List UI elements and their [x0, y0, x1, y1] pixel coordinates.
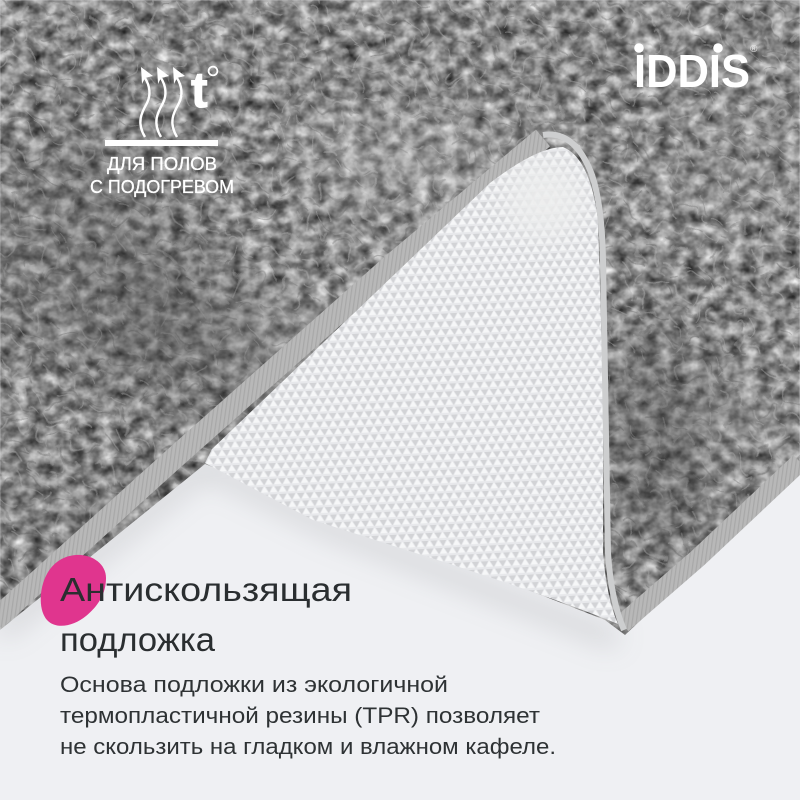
- pink accent blob: [41, 555, 106, 626]
- logo: IDDIS: IDDIS: [634, 45, 750, 97]
- title: подложка: [60, 621, 216, 658]
- rug shadow on the floor: [0, 466, 617, 640]
- icon: heated floor badge: [90, 62, 234, 197]
- icon: heated floor badge: С ПОДОГРЕВОМ: [90, 177, 234, 197]
- logo: IDDIS: ®: [750, 44, 758, 55]
- description text: термопластичной резины (TPR) позволяет: [60, 703, 540, 728]
- title: [60, 571, 352, 658]
- title: Антискользящая: [60, 571, 352, 608]
- icon: heated floor badge: t: [191, 62, 208, 118]
- rug lower-right binding: [622, 462, 800, 624]
- folded corner: white anti-slip backing: [205, 134, 624, 630]
- icon: heated floor badge: ДЛЯ ПОЛОВ: [107, 154, 217, 174]
- description text: Основа подложки из экологичной: [60, 672, 448, 697]
- description text: [60, 672, 556, 759]
- rug: grey shaggy pile: [0, 0, 800, 635]
- description text: не скользить на гладком и влажном кафеле.: [60, 734, 556, 759]
- rug lower-left binding: [0, 138, 543, 620]
